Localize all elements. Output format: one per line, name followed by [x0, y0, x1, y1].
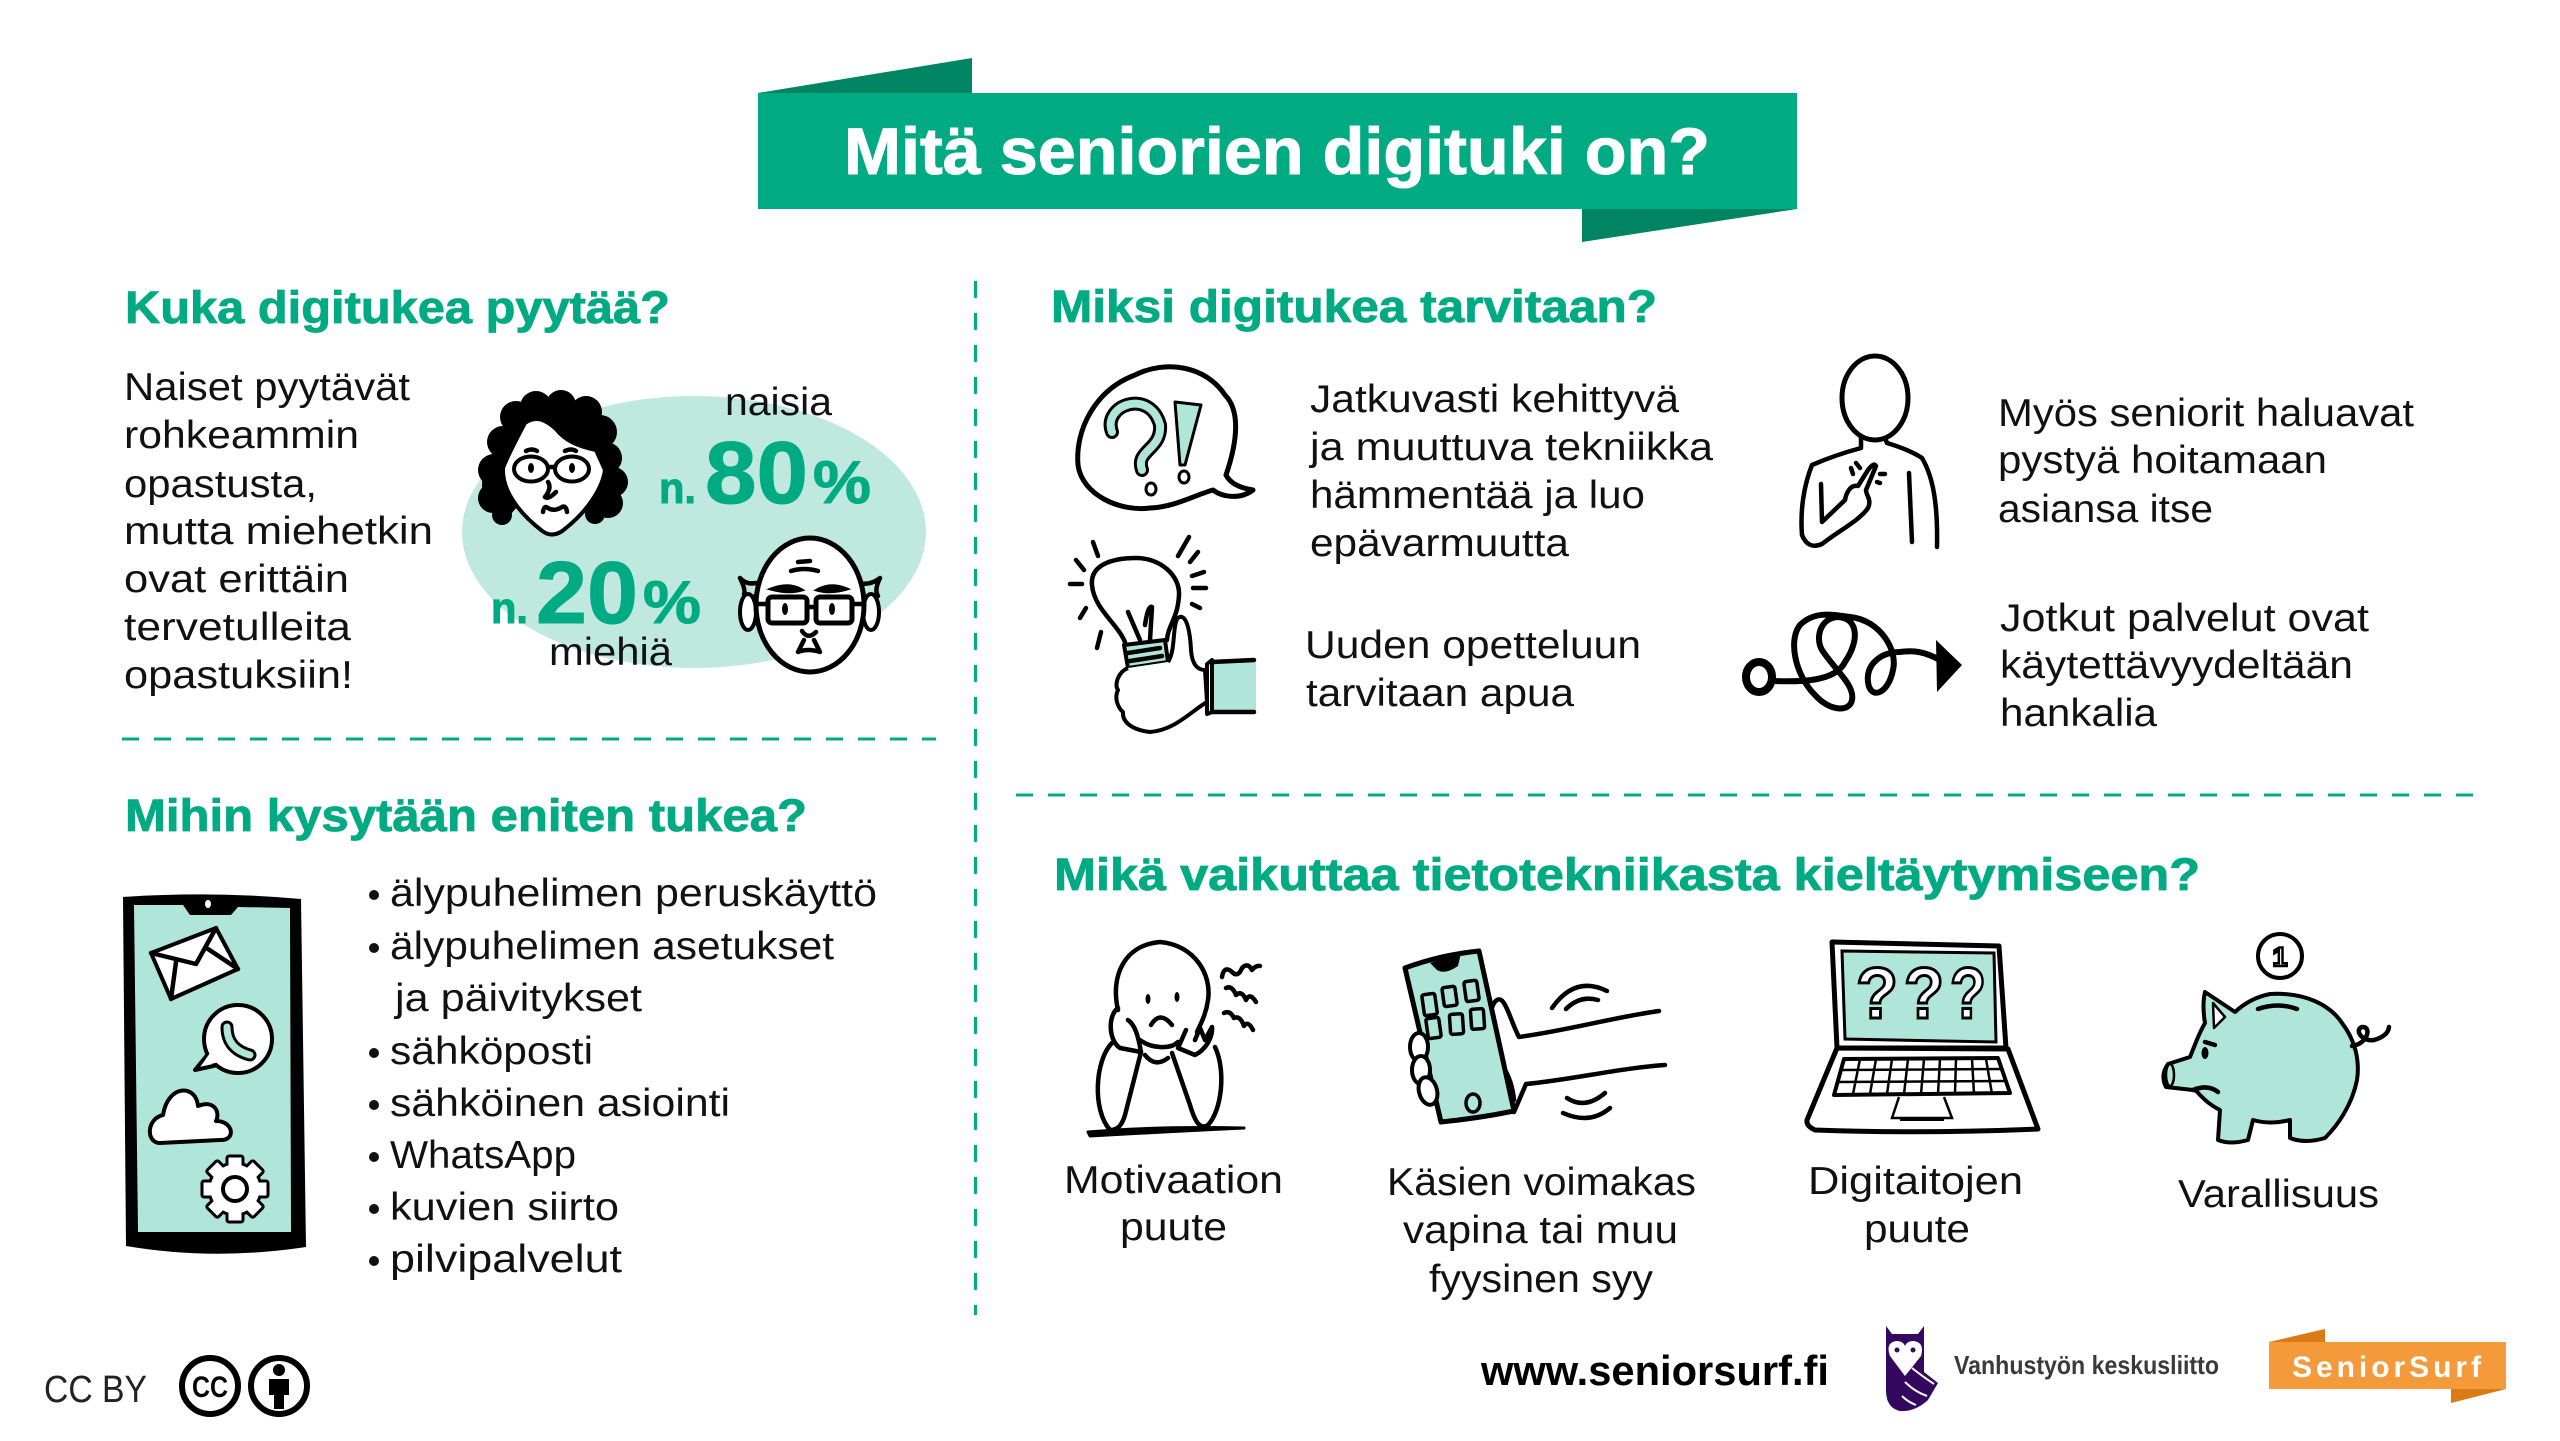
icon: laptop with question marks: ?: [1856, 954, 1898, 1034]
heading: most asked topics: Mihin kysytään eniten tukea?: [125, 790, 807, 841]
icon: whatsapp bubble: [195, 1005, 272, 1073]
text block: women and men: opastuksiin!: [124, 654, 353, 697]
label: lack of digital skills: Digitaitojen: [1808, 1160, 2023, 1203]
list: support topics: ja päivitykset: [394, 977, 642, 1020]
text: seniors want to manage themselves: asiansa itse: [1998, 488, 2213, 531]
icon: light bulb in a hand: [1070, 537, 1256, 732]
text block: women and men: mutta miehetkin: [124, 510, 433, 553]
label: wealth: Varallisuus: [2178, 1173, 2379, 1216]
footer: licence: [44, 1358, 307, 1414]
chart: gender share ellipse: naisia: [725, 381, 832, 424]
text: some services are hard to use: Jotkut palvelut ovat: [2000, 597, 2369, 640]
label: lack of digital skills: [1808, 1160, 2023, 1251]
text block: women and men: [124, 366, 433, 697]
text block: women and men: rohkeammin: [124, 414, 359, 457]
title banner: [758, 58, 1797, 242]
text: constantly changing technology: Jatkuvasti kehittyvä: [1310, 378, 1679, 421]
icon: creative commons: [182, 1358, 238, 1414]
footer: logos: [1480, 1326, 2506, 1411]
icon: attribution person: [251, 1358, 307, 1414]
text: constantly changing technology: hämmentää ja luo: [1310, 474, 1645, 517]
list: support topics: älypuhelimen peruskäyttö: [390, 872, 877, 915]
label: lack of motivation: [1064, 1159, 1283, 1249]
text: some services are hard to use: [2000, 597, 2369, 735]
text: seniors want to manage themselves: [1998, 392, 2414, 531]
list: support topics: sähköinen asiointi: [390, 1082, 730, 1125]
text block: women and men: Naiset pyytävät: [124, 366, 410, 409]
heading: who asks: Kuka digitukea pyytää?: [125, 282, 670, 333]
heading: why needed: Miksi digitukea tarvitaan?: [1051, 281, 1657, 332]
website address: www.seniorsurf.fi: [1480, 1347, 1829, 1394]
label: lack of motivation: Motivaation: [1064, 1159, 1283, 1202]
heading: refusal factors: Mikä vaikuttaa tietotekniikasta kieltäytymiseen?: [1054, 849, 2200, 900]
label: hand tremor or other physical reason: vapina tai muu: [1403, 1209, 1678, 1252]
text: constantly changing technology: epävarmuutta: [1310, 522, 1569, 565]
text: seniors want to manage themselves: Myös seniorit haluavat: [1998, 392, 2414, 435]
list: support topics: älypuhelimen asetukset: [390, 925, 834, 968]
panel: why support is needed: [1051, 281, 2414, 735]
icon: settings gear: [202, 1156, 268, 1222]
list: support topics: kuvien siirto: [390, 1186, 619, 1229]
icon: envelope: [151, 928, 238, 999]
chart: gender share ellipse: 80: [705, 423, 808, 522]
icon: laptop with question marks: ?: [1950, 954, 1986, 1034]
icon: piggy bank and coin: 1: [2272, 942, 2288, 972]
label: lack of motivation: puute: [1120, 1206, 1227, 1249]
title: Mitä seniorien digituki on?: [844, 114, 1710, 188]
chart: gender share ellipse: n.: [659, 464, 696, 513]
text: constantly changing technology: ja muuttuva tekniikka: [1309, 426, 1713, 469]
text: some services are hard to use: hankalia: [2000, 692, 2157, 735]
icon: tangled arrow: [1746, 615, 1962, 708]
text: help is needed for learning: [1305, 624, 1641, 715]
list: support topics: WhatsApp: [390, 1134, 576, 1177]
icon: laptop with question marks: [1807, 942, 2038, 1132]
chart: gender share ellipse: 20: [536, 543, 638, 642]
icon: shaking hand holding phone: [1405, 951, 1665, 1122]
list: support topics: pilvipalvelut: [390, 1238, 622, 1281]
icon: person pointing at self: [1801, 356, 1937, 547]
text block: women and men: opastusta,: [124, 463, 317, 506]
label: CC BY: CC BY: [44, 1369, 147, 1411]
chart: gender share ellipse: %: [813, 449, 871, 516]
text: constantly changing technology: [1309, 378, 1713, 565]
panel: what affects refusing technology: [1054, 849, 2389, 1301]
label: hand tremor or other physical reason: fyysinen syy: [1429, 1258, 1654, 1301]
label: hand tremor or other physical reason: Käsien voimakas: [1387, 1161, 1696, 1204]
chart: gender share ellipse: %: [643, 569, 701, 636]
text block: women and men: ovat erittäin: [124, 558, 349, 601]
icon: unmotivated person: [1088, 942, 1260, 1136]
logo: SeniorSurf ribbon: [2269, 1329, 2506, 1403]
list: support topics: [369, 872, 877, 1281]
text: some services are hard to use: käytettävyydeltään: [2000, 644, 2353, 687]
text: help is needed for learning: Uuden opetteluun: [1305, 624, 1641, 667]
text: help is needed for learning: tarvitaan apua: [1306, 672, 1574, 715]
panel: what support is asked for: [123, 790, 877, 1281]
logo: SeniorSurf ribbon: SeniorSurf: [2292, 1351, 2482, 1384]
text block: women and men: tervetulleita: [124, 606, 351, 649]
icon: creative commons: CC: [192, 1371, 228, 1404]
text: seniors want to manage themselves: pystyä hoitamaan: [1998, 439, 2327, 482]
chart: gender share ellipse: n.: [491, 584, 528, 633]
icon: smartphone with apps: [123, 894, 306, 1254]
logo: Vanhustyön keskusliitto owl: [1886, 1326, 1938, 1411]
chart: gender share ellipse: miehiä: [549, 631, 672, 674]
icon: speech bubble with question and exclamation marks: [1078, 367, 1253, 509]
label: hand tremor or other physical reason: [1387, 1161, 1696, 1301]
label: lack of digital skills: puute: [1864, 1208, 1970, 1251]
icon: older man face: [740, 538, 880, 672]
icon: cloud: [150, 1090, 231, 1143]
list: support topics: sähköposti: [390, 1030, 593, 1073]
icon: piggy bank and coin: [2163, 934, 2389, 1142]
logo text: Vanhustyön keskusliitto: Vanhustyön keskusliitto: [1954, 1350, 2219, 1380]
chart: gender share ellipse: [462, 381, 926, 674]
panel: who asks for support: [124, 282, 926, 697]
icon: laptop with question marks: ?: [1904, 954, 1944, 1034]
icon: older woman face: [478, 390, 628, 535]
